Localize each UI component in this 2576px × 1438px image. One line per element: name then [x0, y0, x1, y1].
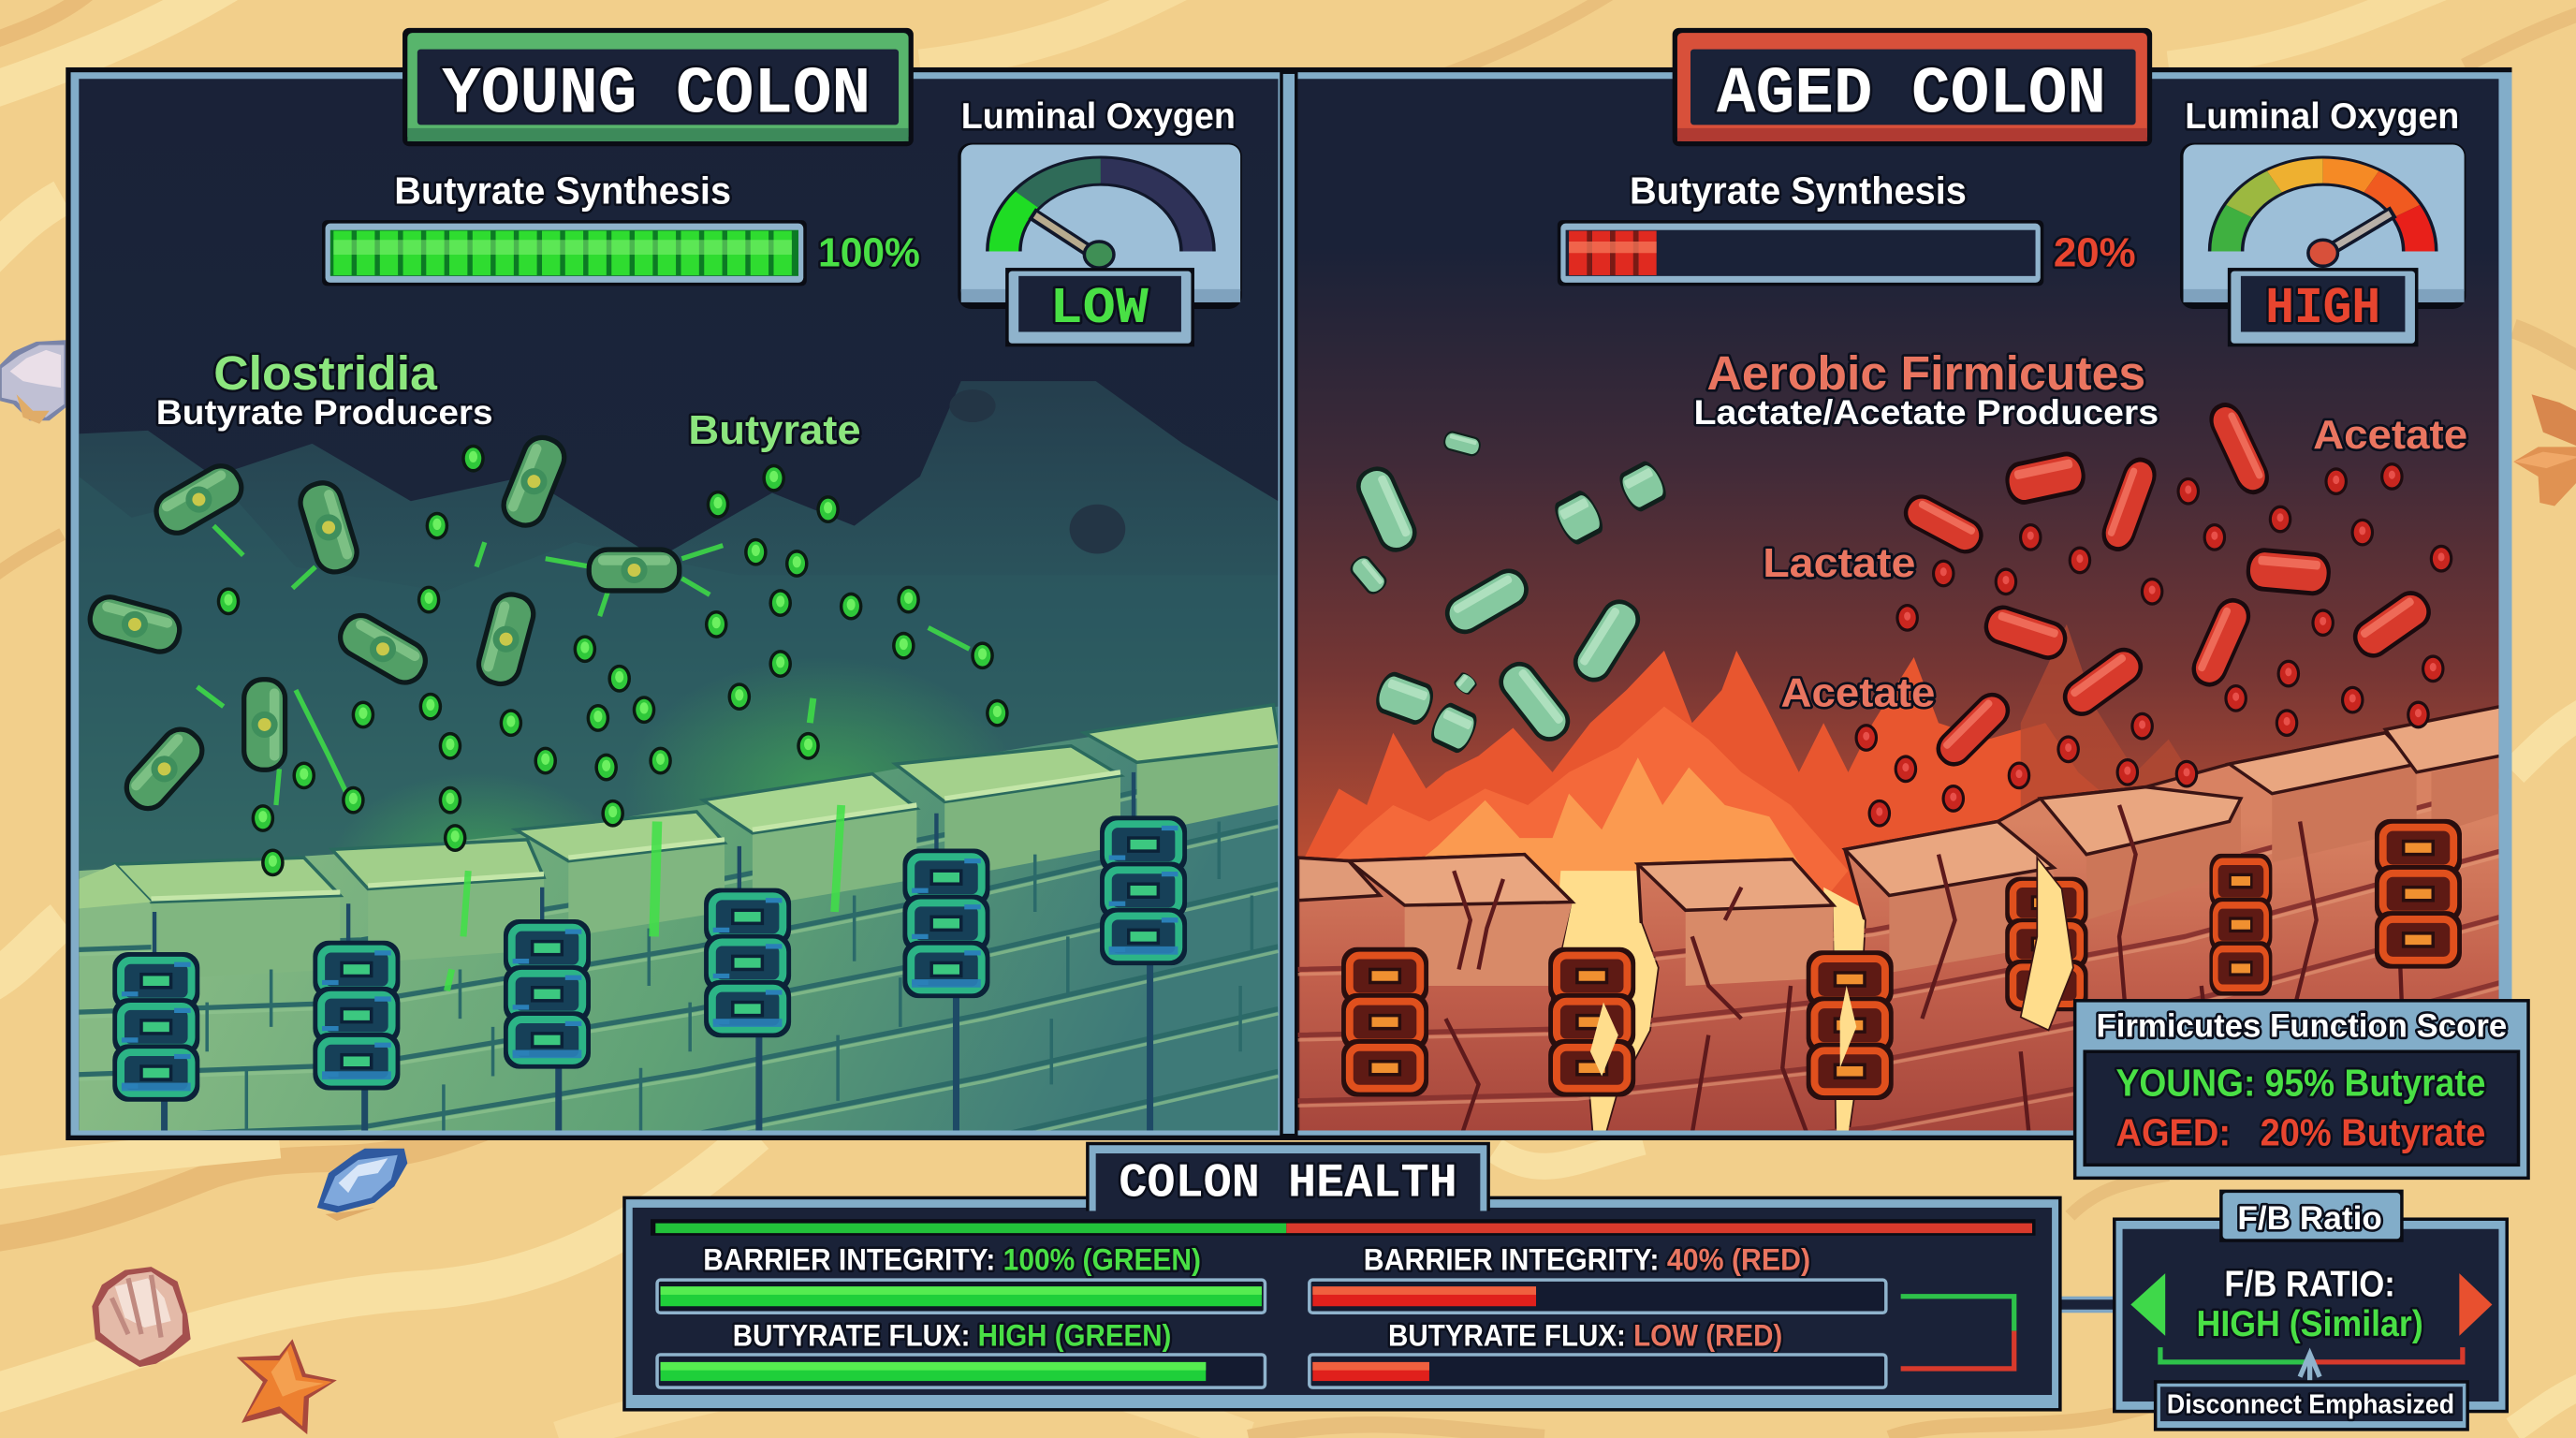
- box: disconnect emphasized: Disconnect Emphasized: [2167, 1389, 2454, 1419]
- wall base: [79, 707, 1278, 1130]
- status bar split: [651, 1219, 2036, 1236]
- bacteria: aerobic firmicutes: [1898, 397, 2437, 773]
- center divider: [1281, 72, 1296, 1136]
- icon: grey clam shell: [0, 340, 66, 424]
- label: butyrate synthesis: Butyrate Synthesis: [1630, 169, 1967, 213]
- gauge arc: [1003, 171, 1197, 252]
- heading: function score: Firmicutes Function Score: [2096, 1007, 2507, 1044]
- butyrate meter: aged: [1558, 169, 2136, 286]
- label: clostridia: Clostridia: [213, 346, 438, 400]
- panel: colon health: [622, 1142, 2062, 1412]
- value: high: HIGH: [2265, 281, 2380, 338]
- label: acetate lower: Acetate: [1781, 670, 1935, 716]
- cracks: [1445, 805, 2407, 1134]
- bacteria: clostridia: [82, 429, 681, 820]
- icon: red arrow: [2459, 1273, 2492, 1336]
- icon: orange starfish right edge: [2513, 394, 2576, 506]
- vertical cracks: [154, 772, 1150, 1130]
- pale gaps: [1559, 871, 1640, 923]
- title badge: young colon: [402, 28, 914, 146]
- text: aged colon title: AGED COLON: [1717, 58, 2106, 132]
- score: aged: AGED: 20% Butyrate: [2116, 1110, 2485, 1153]
- red segments: [1569, 231, 1657, 275]
- pale gap breaks in chains: [2021, 858, 2073, 1030]
- label: butyrate producers: Butyrate Producers: [156, 393, 493, 432]
- gauge: aged luminal oxygen: [2180, 96, 2466, 346]
- scene: aged colon epithelium: [1297, 624, 2499, 1131]
- score: young: YOUNG: 95% Butyrate: [2116, 1062, 2485, 1105]
- label: butyrate synthesis: Butyrate Synthesis: [394, 169, 731, 213]
- green streaks: [198, 526, 970, 990]
- label: luminal oxygen: Luminal Oxygen: [961, 96, 1236, 137]
- value: high similar: HIGH (Similar): [2197, 1304, 2423, 1344]
- tab: colon health: [1086, 1142, 1490, 1216]
- disconnect bracket: [2160, 1347, 2463, 1384]
- gauge: young luminal oxygen: [958, 96, 1242, 346]
- label: acetate top: Acetate: [2313, 412, 2467, 458]
- value: low: LOW: [1050, 281, 1149, 338]
- green segments: [333, 231, 792, 275]
- brick courses: [1297, 801, 2499, 1131]
- label: aerobic firmicutes: Aerobic Firmicutes: [1707, 346, 2145, 400]
- value: 100 percent: 100%: [818, 229, 920, 275]
- flames: [1305, 651, 2099, 906]
- row: aged butyrate flux: [1310, 1318, 1886, 1387]
- box: disconnect emphasized: [2154, 1380, 2469, 1431]
- label: butyrate: Butyrate: [688, 407, 861, 453]
- label: f/b ratio value heading: F/B RATIO:: [2224, 1265, 2395, 1305]
- row: aged barrier integrity: [1310, 1243, 1886, 1313]
- text: young colon title: YOUNG COLON: [442, 58, 871, 132]
- row: aged butyrate flux: BUTYRATE FLUX: LOW (RED): [1388, 1318, 1782, 1352]
- connector: health to ratio: [2056, 1298, 2119, 1312]
- panel: firmicutes function score: [2073, 999, 2530, 1180]
- lactate and acetate dots: [1854, 462, 2452, 828]
- value: 20 percent: 20%: [2054, 229, 2136, 275]
- butyrate dots: [217, 445, 1009, 876]
- icon: scallop shell: [92, 1267, 191, 1367]
- icon: green arrow: [2130, 1273, 2165, 1336]
- label: luminal oxygen: Luminal Oxygen: [2185, 96, 2459, 137]
- butyrate meter: young: [322, 169, 920, 286]
- merlon blocks: [79, 705, 1280, 979]
- needle: [2308, 212, 2393, 266]
- bracket connector: [1901, 1297, 2014, 1369]
- panel: aged colon: [1288, 72, 2511, 1232]
- panel: f/b ratio: [2113, 1190, 2509, 1431]
- icon: blue shell: [317, 1149, 407, 1221]
- needle: [1032, 213, 1114, 268]
- panel: young colon: [71, 72, 1281, 1136]
- label: lactate acetate producers: Lactate/Acetate Producers: [1693, 393, 2159, 432]
- row: young butyrate flux: BUTYRATE FLUX: HIGH (GREEN): [733, 1318, 1171, 1352]
- row: young barrier integrity: [657, 1243, 1265, 1313]
- gauge arc: [2226, 171, 2420, 252]
- row: aged barrier integrity: BARRIER INTEGRITY: 40% (RED): [1364, 1243, 1810, 1277]
- frame shadow: [66, 67, 2511, 1140]
- tab: f/b ratio: [2219, 1190, 2404, 1242]
- scene: young colon epithelium: [79, 381, 1279, 1131]
- chains rusted: [1345, 823, 2458, 1096]
- tab: f/b ratio: F/B Ratio: [2237, 1200, 2382, 1237]
- title badge: aged colon: [1673, 28, 2152, 146]
- bacteria: failing clostridia: [1347, 430, 1671, 756]
- joints: [207, 822, 1251, 1130]
- icon: orange starfish: [237, 1339, 337, 1434]
- re-open gaps over courses: [1563, 903, 1658, 1131]
- label: lactate: Lactate: [1763, 540, 1915, 586]
- wall sections: [1298, 855, 1593, 1134]
- block tops: [1298, 707, 2500, 986]
- row: young butyrate flux: [657, 1318, 1265, 1387]
- row: young barrier integrity: BARRIER INTEGRITY: 100% (GREEN): [703, 1243, 1201, 1277]
- chains: [117, 820, 1183, 1097]
- tab: colon health: COLON HEALTH: [1119, 1158, 1457, 1211]
